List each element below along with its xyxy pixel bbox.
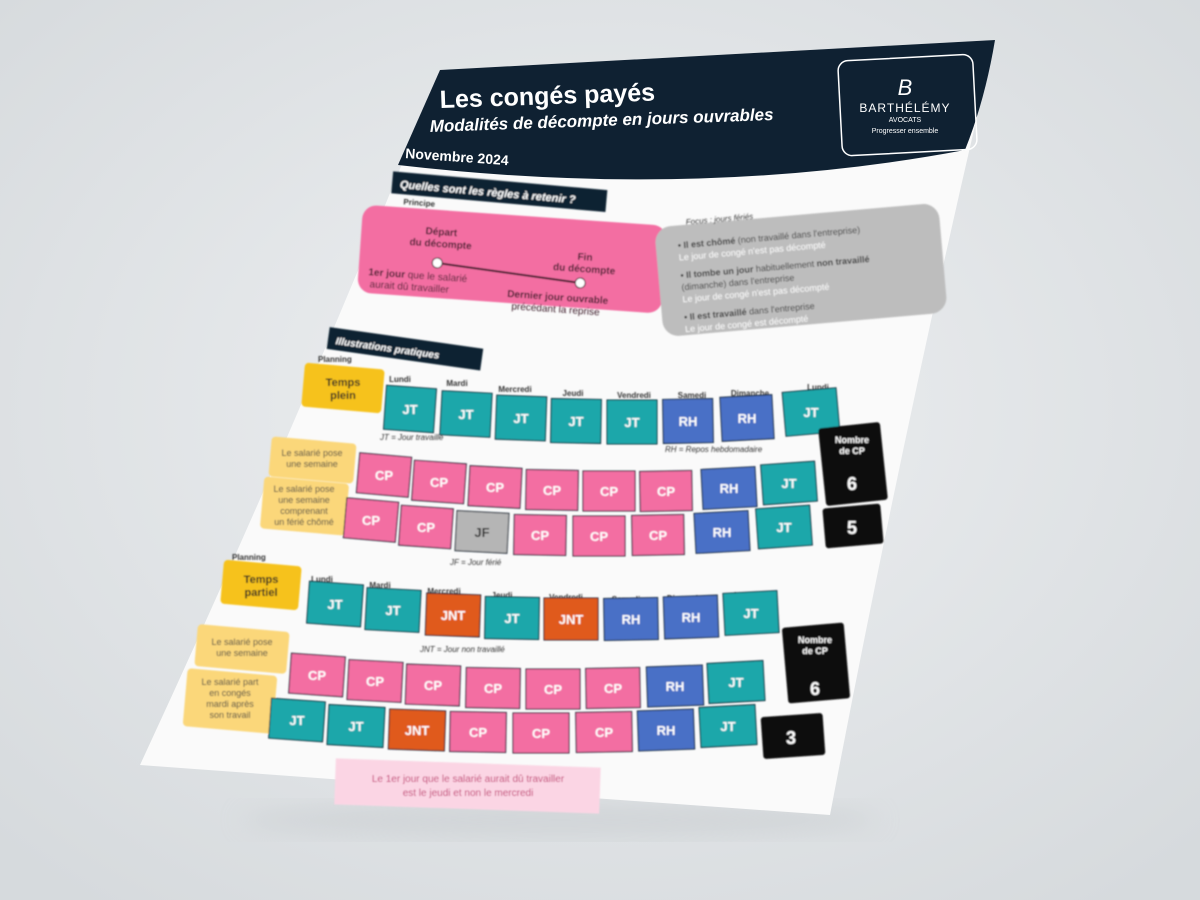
temps partiel planning: Temps xyxy=(244,574,278,586)
temps partiel planning: partiel xyxy=(244,587,278,599)
row: full time week: JT xyxy=(803,405,819,420)
heading: illustrations: Illustrations pratiques xyxy=(335,336,440,362)
black count boxes full time: Nombre xyxy=(835,435,869,445)
text: CP xyxy=(604,681,622,696)
text: mardi après xyxy=(206,699,254,709)
labels yellow: un férié chômé xyxy=(274,517,334,527)
temps partiel planning: Mardi xyxy=(369,581,391,590)
logo: B xyxy=(898,75,912,100)
text: RH xyxy=(666,679,684,694)
title: Les congés payés xyxy=(439,78,655,114)
temps plein planning: Lundi xyxy=(807,383,829,392)
panel: principe: 1er jour que le salarié xyxy=(368,267,468,285)
labels yellow: Le salarié pose xyxy=(273,484,335,494)
logo: AVOCATS xyxy=(889,117,922,124)
subtitle: Modalités de décompte en jours ouvrables xyxy=(429,105,774,136)
temps partiel planning: Samedi xyxy=(612,595,640,604)
temps partiel planning: Lundi xyxy=(311,575,333,584)
panel: principe: Départ xyxy=(425,226,458,239)
text: JT xyxy=(504,611,520,626)
text: en congés xyxy=(209,688,251,698)
panel: focus jours fériés: • Il tombe un jour habituellement non travaillé xyxy=(680,254,870,280)
text: de CP xyxy=(802,646,828,656)
row: full time week: JT xyxy=(402,402,418,417)
row: full time week: RH xyxy=(679,414,697,429)
text: JT xyxy=(385,603,401,618)
labels yellow xyxy=(260,436,357,536)
panel: focus jours fériés: • Il est travaillé dans l'entreprise xyxy=(684,301,815,322)
temps partiel planning: Vendredi xyxy=(549,593,583,602)
callout note: est le jeudi et non le mercredi xyxy=(403,788,533,799)
panel: principe: Principe xyxy=(403,197,436,209)
text: JT xyxy=(743,606,759,621)
temps plein planning: Vendredi xyxy=(617,391,651,400)
row: pose une semaine: JT xyxy=(781,476,797,491)
panel: focus jours fériés: Le jour de congé n'est pas décompté xyxy=(678,240,826,263)
row: pose une semaine: CP xyxy=(430,475,448,490)
heading: rules: Quelles sont les règles à retenir ? xyxy=(399,179,576,206)
row: full time week xyxy=(384,385,840,444)
row: full time week: JT xyxy=(568,414,584,429)
temps plein planning: Jeudi xyxy=(563,389,583,398)
temps partiel planning xyxy=(220,553,756,610)
row: pose une semaine: CP xyxy=(543,483,561,498)
row: semaine avec férié: RH xyxy=(713,525,731,540)
callout note xyxy=(334,758,601,814)
text: CP xyxy=(544,682,562,697)
row: pose une semaine: CP xyxy=(486,480,504,495)
text: CP xyxy=(484,681,502,696)
date: Novembre 2024 xyxy=(405,145,509,168)
text: JT = Jour travaillé xyxy=(379,433,444,442)
black count boxes full time xyxy=(818,422,888,548)
row: semaine avec férié: CP xyxy=(417,520,435,535)
panel: principe: Fin xyxy=(577,252,593,264)
black count boxes full time: de CP xyxy=(839,446,865,456)
text: son travail xyxy=(209,710,251,720)
text: CP xyxy=(595,725,613,740)
row: full time week: JT xyxy=(458,407,474,422)
text: 6 xyxy=(810,679,820,699)
temps plein planning: Dimanche xyxy=(731,389,770,398)
row: pose une semaine xyxy=(356,453,817,511)
labels yellow: une semaine xyxy=(286,459,338,469)
callout note: Le 1er jour que le salarié aurait dû travailler xyxy=(372,774,565,785)
panel: principe: Dernier jour ouvrable xyxy=(507,289,609,307)
text: CP xyxy=(366,674,384,689)
temps plein planning: Samedi xyxy=(678,391,706,400)
heading: rules xyxy=(391,171,607,212)
temps partiel planning: Dimanche xyxy=(667,594,706,603)
text: JNT xyxy=(405,723,429,738)
panel: focus jours fériés: Focus : jours fériés xyxy=(685,212,754,227)
temps partiel planning: Jeudi xyxy=(492,591,512,600)
panel: focus jours fériés: Le jour de congé est décompté xyxy=(685,314,809,334)
labels yellow: comprenant xyxy=(280,506,328,516)
temps plein planning: Planning xyxy=(318,355,352,364)
row: semaine avec férié: JF xyxy=(474,525,490,540)
text: JT xyxy=(348,719,364,734)
temps plein planning: plein xyxy=(330,390,356,402)
text: RH xyxy=(682,610,700,625)
row: semaine avec férié: CP xyxy=(362,513,380,528)
row: pose une semaine: CP xyxy=(657,484,675,499)
black count boxes full time: 5 xyxy=(847,518,857,538)
text: Le salarié part xyxy=(201,677,259,687)
row: pose une semaine: CP xyxy=(375,468,393,483)
row: semaine avec férié xyxy=(343,498,812,556)
text: 3 xyxy=(786,728,796,748)
text: CP xyxy=(308,668,326,683)
logo: BARTHÉLÉMY xyxy=(859,100,951,115)
panel: focus jours fériés xyxy=(654,196,948,337)
labels yellow: une semaine xyxy=(278,495,330,505)
text: JT xyxy=(728,675,744,690)
text: JNT = Jour non travaillé xyxy=(419,645,505,654)
row: pose une semaine: RH xyxy=(720,481,738,496)
text: RH xyxy=(622,612,640,627)
text: JNT xyxy=(441,608,465,623)
text: une semaine xyxy=(216,648,268,658)
panel: principe: du décompte xyxy=(553,262,616,277)
paper xyxy=(140,40,995,815)
temps partiel planning: Mercredi xyxy=(427,587,461,596)
text: JF = Jour férié xyxy=(449,558,502,567)
text: CP xyxy=(469,725,487,740)
row: full time week: RH xyxy=(738,411,756,426)
temps partiel planning: Planning xyxy=(232,553,266,562)
text: CP xyxy=(424,678,442,693)
panel: focus jours fériés: • Il est chômé (non travaillé dans l'entreprise) xyxy=(677,225,861,251)
panel: principe: précédant la reprise xyxy=(511,301,600,318)
header band xyxy=(398,40,995,179)
temps plein planning: Mercredi xyxy=(498,385,532,394)
temps plein planning xyxy=(301,355,829,413)
temps partiel planning: Lundi xyxy=(734,591,756,600)
temps plein planning: Lundi xyxy=(389,375,411,384)
heading: illustrations xyxy=(327,327,483,371)
text: RH xyxy=(657,723,675,738)
text: JT xyxy=(289,713,305,728)
text: RH = Repos hebdomadaire xyxy=(665,445,763,454)
black count boxes full time: 6 xyxy=(847,474,857,494)
panel: focus jours fériés: Le jour de congé n'est pas décompté xyxy=(682,282,830,304)
panel: focus jours fériés: (dimanche) dans l'entreprise xyxy=(681,273,795,292)
row: semaine avec férié: CP xyxy=(590,529,608,544)
text: CP xyxy=(532,726,550,741)
row: semaine avec férié: CP xyxy=(531,528,549,543)
panel: principe: du décompte xyxy=(409,237,472,252)
text: Nombre xyxy=(798,635,832,645)
row: semaine avec férié: JT xyxy=(776,520,792,535)
row: pose une semaine: CP xyxy=(600,484,618,499)
temps plein planning: Mardi xyxy=(446,379,468,388)
text: JT xyxy=(327,597,343,612)
row: full time week: JT xyxy=(513,411,529,426)
text: JNT xyxy=(559,612,583,627)
panel: principe: aurait dû travailler xyxy=(369,279,450,296)
logo xyxy=(838,54,977,156)
row: semaine avec férié: CP xyxy=(649,528,667,543)
labels yellow: Le salarié pose xyxy=(281,448,343,458)
text: Le salarié pose xyxy=(211,637,273,647)
text: JT xyxy=(720,719,736,734)
panel: principe xyxy=(356,195,668,323)
row: full time week: JT xyxy=(624,415,640,430)
temps plein planning: Temps xyxy=(326,377,360,389)
logo: Progresser ensemble xyxy=(872,128,938,135)
